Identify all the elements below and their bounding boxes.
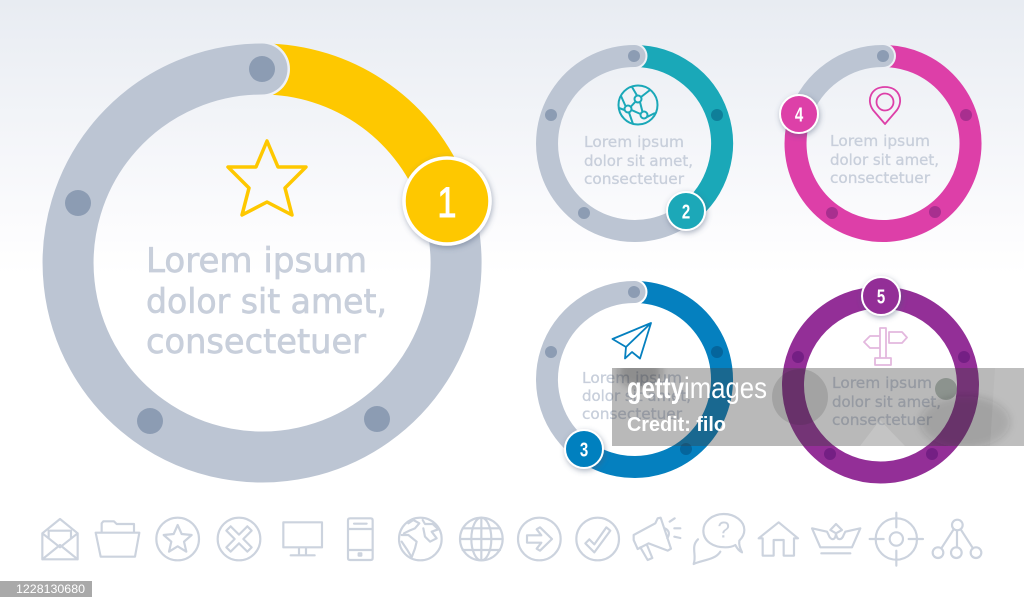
icon: earth [399,518,442,560]
number badge 5 [862,277,900,315]
icon: paper plane [612,323,651,358]
text block [830,132,939,187]
text block: Lorem ipsum [146,241,367,281]
text block: dolor sit amet, [146,282,387,322]
gray arc segment [68,69,456,457]
watermark background [612,368,1024,446]
teal arc segment [634,56,722,213]
number badge 3 [565,430,603,468]
image id strip [0,581,92,597]
watermark band [612,368,1024,446]
text block: consectetuer [830,169,931,187]
magenta arc segment [796,56,971,231]
number badge 1 [404,158,490,244]
number badge 2: 2 [682,200,690,223]
icon: speech bubbles: ? [717,516,730,542]
ring dots [545,50,723,219]
text block: consectetuer [582,405,683,423]
text block: consectetuer [584,170,685,188]
text block: consectetuer [146,322,366,362]
icon: star [228,141,306,215]
panel: step 5 purple ring [792,277,970,472]
icon: monitor [283,522,322,555]
icon: location pin [870,87,900,124]
number badge 4 [780,95,818,133]
text block: Lorem ipsum [830,132,930,150]
text block: Lorem ipsum [584,133,684,151]
icon row: left group [42,518,503,560]
image id: 1228130680 [16,584,85,596]
gray arc segment [547,292,634,450]
blue arc segment [583,292,722,467]
ring dots [792,351,970,460]
icon: smartphone [348,518,373,560]
watermark logo text: images [684,372,767,405]
icon: star in circle [156,518,199,560]
text block: dolor sit amet, [582,387,691,405]
watermark blobs [615,368,1010,446]
icon: x in circle [218,518,260,560]
icon: globe grid [460,518,503,560]
panel: step 3 blue ring [545,286,723,468]
strip background [0,581,92,597]
icon: signpost [864,328,907,365]
panel: step 4 magenta ring [780,50,972,231]
yellow arc segment [262,69,446,201]
text block: Lorem ipsum [832,374,932,392]
text block [582,369,691,423]
number badge 5: 5 [877,285,885,308]
number badge 4: 4 [795,103,803,126]
icon: hierarchy nodes [933,520,981,558]
gray arc segment [800,56,883,115]
number badge 1: 1 [437,179,457,227]
number badge 2 [667,192,705,230]
watermark credit: Credit: filo [627,414,726,436]
icon: network globe [618,86,658,124]
text block [146,241,387,362]
icon: megaphone [634,518,680,560]
icon row: right group [518,513,981,566]
icon: open envelope [42,519,78,559]
icon: crown [812,524,860,553]
number badge 3: 3 [580,438,588,461]
ring dots [65,56,390,434]
panel: step 2 teal ring [545,50,723,231]
purple ring [793,298,968,472]
icon: house [759,522,798,556]
ring dots [545,286,723,455]
icon: check in circle [576,518,619,560]
text block: dolor sit amet, [584,152,693,170]
text block [584,133,693,188]
watermark logo text: getty [627,372,684,405]
text block: Lorem ipsum [582,369,682,387]
text block: dolor sit amet, [832,393,941,411]
text block: dolor sit amet, [830,151,939,169]
text block: consectetuer [832,411,933,429]
text block [832,374,941,429]
ring dots [826,50,972,219]
panel: step 1 large ring [65,56,490,457]
icon: speech bubbles [694,514,744,564]
icon: arrow in circle [518,518,561,560]
gray arc segment [547,56,688,231]
icon: folder [96,521,139,557]
icon: target [870,513,923,566]
